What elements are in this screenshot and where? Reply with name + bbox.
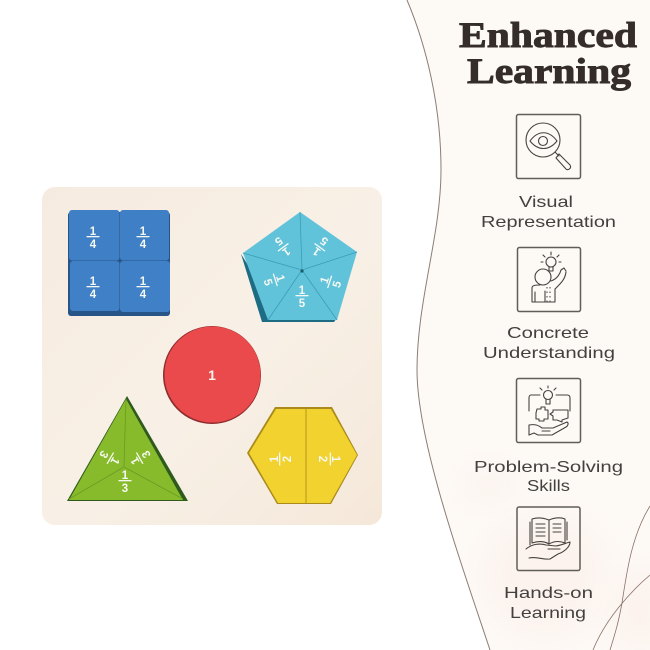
panel: right sidebar xyxy=(407,0,650,650)
puzzle: cyan pentagon fifths: 5 xyxy=(299,298,306,310)
feature: visual representation: Representation xyxy=(481,214,616,231)
puzzle: blue square quarters: 4 xyxy=(140,289,147,301)
icon: magnifying glass with eye xyxy=(516,114,580,178)
heading xyxy=(459,15,637,91)
puzzle: yellow hexagon halves: 2 xyxy=(316,456,328,462)
puzzle: blue square quarters: 4 xyxy=(90,239,97,251)
puzzle: green triangle thirds: 1 xyxy=(122,470,129,482)
feature: concrete understanding: Understanding xyxy=(483,345,615,362)
icon: hand holding puzzle and bulb xyxy=(516,378,580,442)
heading: Learning xyxy=(467,51,631,91)
feature: concrete understanding xyxy=(483,248,615,362)
puzzle: green triangle thirds xyxy=(67,396,188,501)
label: visual representation: Visual xyxy=(519,194,573,211)
puzzle: yellow hexagon halves: 1 xyxy=(269,455,281,462)
puzzle: red circle xyxy=(163,326,261,424)
puzzle: cyan pentagon fifths xyxy=(241,212,357,322)
puzzle: blue square quarters: 1 xyxy=(90,276,97,288)
puzzle: green triangle thirds: 3 xyxy=(96,448,110,460)
puzzle: blue square quarters: 1 xyxy=(90,226,97,238)
puzzle: blue square quarters: 1 xyxy=(140,276,147,288)
feature: hands-on learning xyxy=(504,507,593,622)
puzzle: green triangle thirds: 1 xyxy=(129,454,142,466)
puzzle: blue square quarters: 4 xyxy=(140,239,147,251)
label: problem-solving skills: Problem-Solving xyxy=(474,459,623,476)
feature: problem-solving skills xyxy=(474,378,623,495)
puzzle: blue square quarters: 4 xyxy=(90,289,97,301)
puzzle: yellow hexagon halves: 2 xyxy=(282,456,294,462)
icon: person with light bulb xyxy=(518,248,580,312)
feature: visual representation xyxy=(481,114,616,231)
puzzle: yellow hexagon halves: 1 xyxy=(329,456,341,463)
puzzle: cyan pentagon fifths: 1 xyxy=(319,275,332,285)
label: hands-on learning: Hands-on xyxy=(504,585,593,602)
heading: Enhanced xyxy=(459,15,637,55)
puzzle: green triangle thirds: 1 xyxy=(107,455,121,467)
feature: problem-solving skills: Skills xyxy=(527,478,570,495)
puzzle: cyan pentagon fifths: 5 xyxy=(261,278,274,288)
label: concrete understanding: Concrete xyxy=(507,325,589,342)
panel: wooden board xyxy=(42,187,382,525)
puzzle: cyan pentagon fifths: 1 xyxy=(310,244,323,258)
puzzle: blue square quarters: 1 xyxy=(140,226,147,238)
puzzle: cyan pentagon fifths: 5 xyxy=(331,279,344,289)
puzzle: red circle: 1 xyxy=(208,367,216,383)
feature: hands-on learning: Learning xyxy=(510,605,586,622)
puzzle: green triangle thirds: 3 xyxy=(122,483,128,495)
puzzle: cyan pentagon fifths: 5 xyxy=(318,233,331,247)
puzzle: cyan pentagon fifths: 1 xyxy=(273,274,287,284)
icon: hand holding open book xyxy=(517,507,580,570)
puzzle: cyan pentagon fifths: 1 xyxy=(279,244,292,258)
puzzle: cyan pentagon fifths: 1 xyxy=(299,285,306,297)
puzzle: blue square quarters xyxy=(68,210,170,316)
puzzle: green triangle thirds: 3 xyxy=(140,448,154,460)
puzzle: cyan pentagon fifths: 5 xyxy=(272,234,284,248)
puzzle: yellow hexagon halves xyxy=(247,407,358,504)
